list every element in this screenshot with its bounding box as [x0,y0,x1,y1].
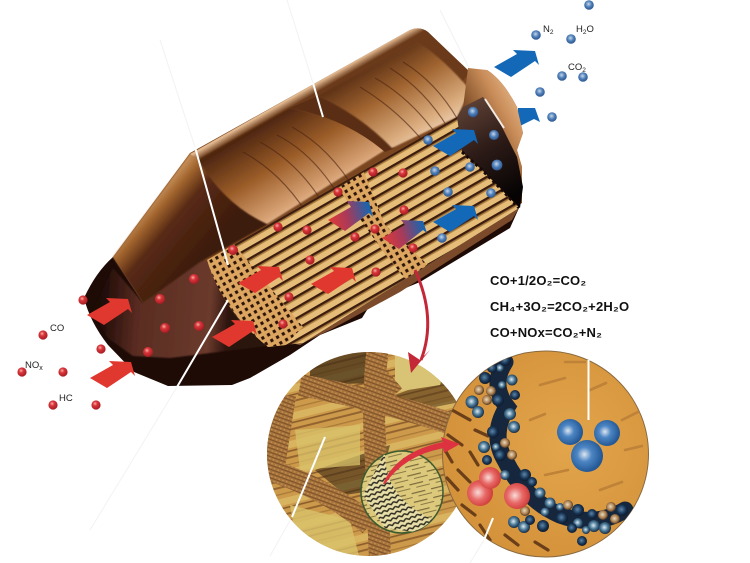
chemical equations: CO+1/2O₂=CO₂ [490,273,586,288]
flow arrows: exhaust in, mixed, clean out [87,50,539,388]
rope lattice bands [270,345,455,560]
red arrows [87,266,356,388]
blue arrows [433,50,539,232]
leader lines [484,360,588,540]
catalytic converter body [84,28,530,387]
red arrow from monolith to left circle [408,270,430,373]
gas labels: clean output [543,24,594,74]
gas labels: clean output: 2 [583,29,587,36]
groove between drums [290,96,395,152]
faint leader lines [90,0,484,563]
catalyst bead band [498,362,625,520]
gas labels: clean output: H [576,24,583,35]
honeycomb inlet face [207,244,303,347]
outlet arrow behind flange [518,108,540,127]
first drum [198,108,385,224]
shell top rim [190,28,470,160]
outlet cavity [457,97,523,208]
blue clean-gas balls [557,419,620,472]
gas labels: clean output: 2 [582,67,586,74]
gas labels: pollutants: NO [25,360,39,371]
inlet housing [92,258,266,358]
chemical equations [490,273,629,340]
ragged outlet edge of monolith [462,152,519,208]
gas labels: pollutants: x [39,365,43,372]
left magnified circle: honeycomb walls [267,352,456,556]
transitional arrows [328,201,373,231]
red pollutant molecules [17,167,418,410]
washcoat specks [445,410,548,550]
cone section [113,150,268,303]
right magnified circle: catalyst surface [442,351,648,557]
drum ribs [243,62,458,222]
honeycomb middle band [338,172,430,280]
small inset circle [361,451,443,533]
leader line [292,437,325,517]
gas labels: clean output: CO [568,62,582,73]
gas labels: pollutants: HC [59,393,73,404]
red arrow between inset and right circle [383,437,460,484]
dark lower silhouette [84,208,519,386]
gas labels: clean output: N [543,24,550,35]
lower shell strip [303,208,519,343]
bronze base silhouette [113,28,523,345]
gas labels: pollutants: CO [50,323,64,334]
monolith cutaway [207,117,519,347]
chemical equations: CH₄+3O₂=2CO₂+2H₂O [490,299,629,314]
gas labels: clean output: O [586,24,594,35]
dark shaded panels [310,352,375,384]
chemical equations: CO+NOx=CO₂+N₂ [490,325,602,340]
gas labels: pollutants [25,323,73,404]
gas labels: clean output: 2 [550,29,554,36]
blue clean-gas molecules [423,0,594,243]
leader lines on body [177,83,323,387]
red pollutant balls [467,467,530,509]
flange [463,68,523,190]
stripe channels [207,117,519,347]
second drum [318,42,470,148]
